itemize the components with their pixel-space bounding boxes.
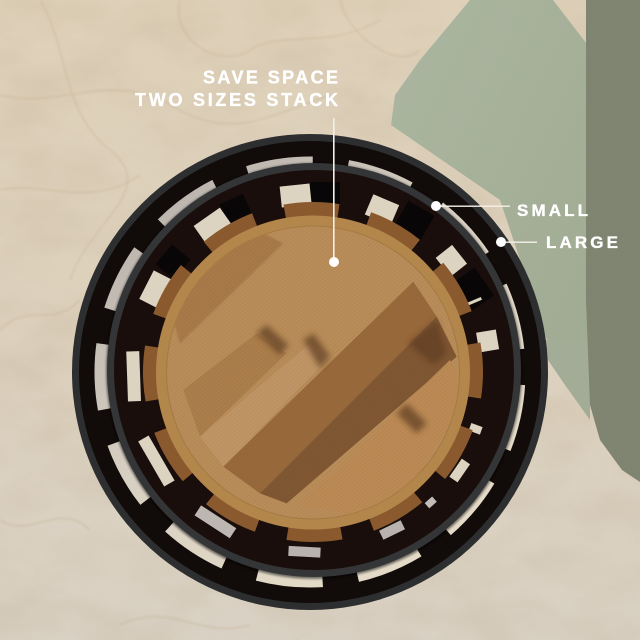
small label: SMALL [517, 201, 588, 220]
cloth: dark green linen [586, 0, 640, 482]
large label: LARGE [546, 233, 618, 252]
callout: save space [135, 68, 339, 267]
wooden board [156, 216, 470, 530]
callout dot [329, 257, 339, 267]
cloth: light sage napkin [391, 0, 590, 410]
small line [436, 206, 510, 207]
cloth: lower fold [545, 338, 590, 420]
small basket: shadow [106, 163, 522, 579]
board: rim [156, 216, 470, 530]
heading: two sizes stack: TWO SIZES STACK [135, 90, 338, 110]
small basket: inner wall [114, 170, 514, 570]
callout: small [431, 201, 588, 220]
small basket: black shadow blocks [155, 182, 494, 313]
callout: large [496, 233, 618, 252]
board: juice groove [166, 226, 460, 520]
large basket: inner wall [79, 141, 541, 603]
large line [501, 242, 537, 243]
small basket: slots [126, 183, 499, 558]
small basket: outer rim [107, 163, 521, 577]
callout line [333, 118, 335, 262]
board: bamboo strips [167, 226, 459, 518]
board: bamboo nodes [257, 320, 447, 433]
wooden base of large basket seen through slots [124, 183, 502, 561]
small basket [106, 163, 522, 579]
large basket: outer rim [72, 134, 548, 610]
small dot [431, 201, 441, 211]
heading: save space: SAVE SPACE [203, 68, 338, 88]
board: wood grain [160, 220, 470, 530]
large dot [496, 237, 506, 247]
